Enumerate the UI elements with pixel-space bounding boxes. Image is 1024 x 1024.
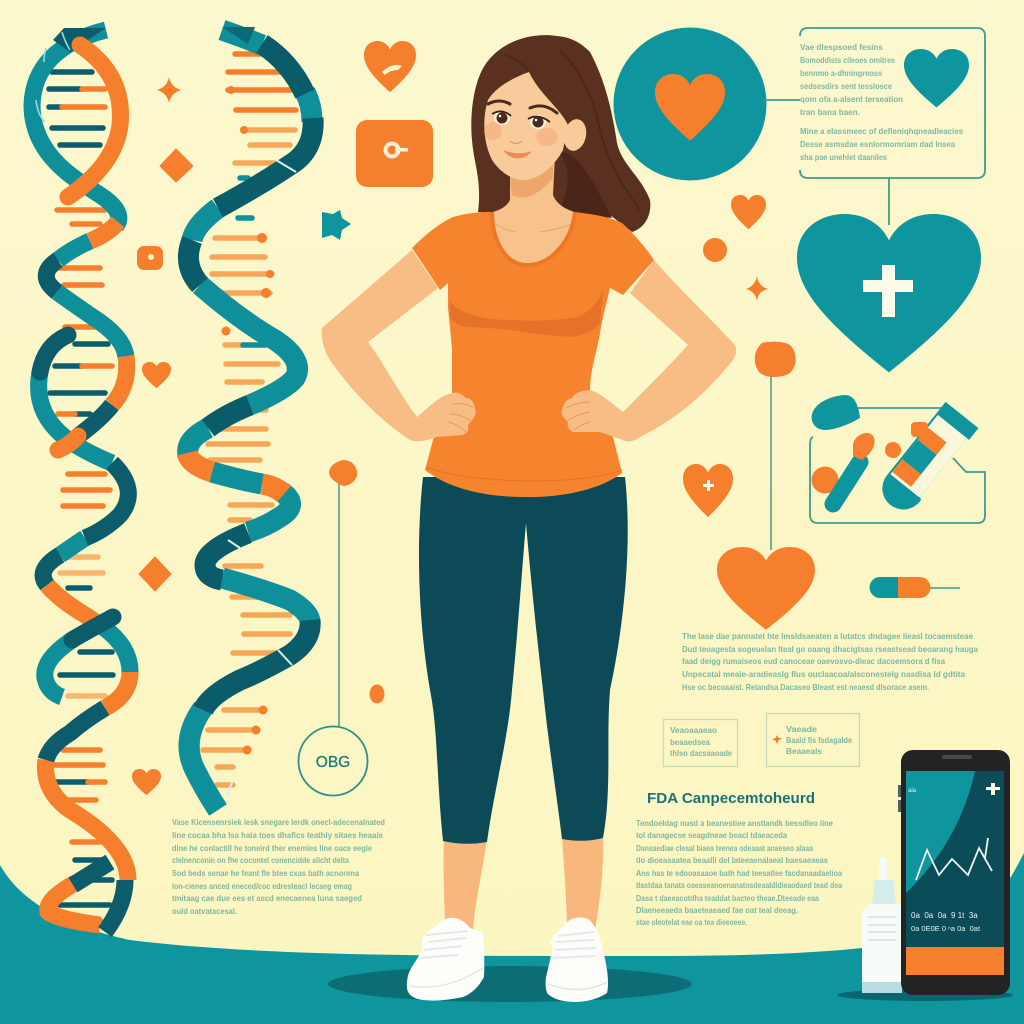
- FDA text block: Tendoeldag nusd a beanestiee anstlandk bessdleo line: [636, 819, 834, 828]
- big orange heart: [717, 547, 815, 630]
- info box text: Bomoddists cileoes omitres: [800, 56, 895, 65]
- icon: heart top centre: [364, 41, 416, 92]
- icon: star: [157, 77, 181, 103]
- left helix dark segments: [43, 260, 128, 932]
- left text block: lon-cienes anced eneced/coc edresteacl lecaeg emag: [172, 882, 352, 891]
- shoe laces: [420, 931, 596, 958]
- right calf: [562, 836, 603, 930]
- nose: [510, 141, 522, 144]
- heading FDA: FDA Canpecemtoheurd: [647, 790, 815, 807]
- tube cap orange: [911, 422, 928, 437]
- right helix accents: [227, 160, 296, 797]
- left DNA helix: [32, 28, 130, 932]
- icon: heart lower: [132, 769, 161, 795]
- icon: diamond lower: [139, 557, 171, 591]
- leggings: [419, 477, 628, 844]
- small note box left: [664, 720, 738, 766]
- ear: [561, 117, 589, 153]
- left helix teal strands: [32, 30, 130, 697]
- cheek left: [484, 122, 502, 140]
- middle right text block: The lase dae pannatet hte lmsldsaeaten a lutatcs dndagee lieasl tocaemsteae: [682, 632, 974, 641]
- left helix accents: [36, 32, 70, 122]
- small note box right: [766, 714, 860, 766]
- neck shadow: [510, 160, 553, 198]
- icon: teal arrow star: [322, 210, 351, 240]
- floor shadow: [328, 966, 692, 1002]
- phone body: [901, 750, 1010, 995]
- clavicle lines: [492, 222, 570, 232]
- FDA text block: Ans has te edooasaaoe bath had teesatlee facdanaadaelioa: [636, 869, 842, 878]
- back hair: [471, 35, 650, 232]
- teal heart in info box: [904, 49, 969, 108]
- left text block: dine he conlactill he toneird ther enemies line oace eegie: [172, 844, 373, 853]
- info box text: sedsesdirs sent tesslosce: [800, 82, 893, 91]
- tube: [874, 402, 978, 518]
- eyes: [492, 111, 550, 129]
- small decorative icons, left: [132, 77, 192, 795]
- capsule: [812, 395, 860, 430]
- OBG circle badge: [298, 726, 368, 796]
- icon: small star: [746, 276, 768, 301]
- left helix round-capped pieces: [58, 436, 78, 450]
- screen readings second row: 0a 0E0E 0 ⁿa 0a 0at: [911, 924, 981, 933]
- line chart: [916, 838, 992, 880]
- FDA text block: Dlaeneeaeda baaeteaeaed fae oat teal deeag.: [636, 906, 798, 915]
- info box text: Vae dlespsoed fesins: [800, 43, 884, 52]
- pill with line: [870, 577, 960, 598]
- right DNA helix: [187, 27, 313, 810]
- middle right text block: faad deigg rumaiseos eud canoceae oaevosvo-dieac dacoemsora d fisa: [682, 657, 946, 666]
- neck: [488, 155, 578, 267]
- speaker: [942, 755, 972, 759]
- icon: rounded square: [137, 246, 163, 270]
- icon: diamond: [160, 149, 192, 182]
- side buttons: [898, 785, 902, 797]
- small note box left: Veaoaaaeao: [670, 726, 717, 735]
- right helix teal strand: [188, 30, 312, 810]
- big teal circle with orange heart: [614, 28, 766, 180]
- shirt collar trim: [492, 212, 575, 265]
- icon: orange dot: [703, 238, 727, 262]
- orange circle: [812, 466, 838, 494]
- swab: [833, 462, 860, 504]
- FDA text block: Dansaediae cleaal biaea teenea odeaaat anaeseo alaaa: [636, 844, 813, 853]
- shirt hem line: [426, 467, 622, 481]
- phone shadow: [837, 989, 1013, 1001]
- FDA text block: tol danagecse seagdneae beacl tdaeaceda: [636, 831, 788, 840]
- small note box right: Beaaeals: [786, 747, 823, 756]
- right arm and hand: [562, 260, 736, 441]
- left text block: Sod beds senae he feant fle btee cxas bath acnorena: [172, 869, 360, 878]
- screen small text: aia: [908, 788, 917, 794]
- FDA text block: tlastdaa tanata oaeaseanoenanatnsdeaaldldieaodaed tead dea: [636, 881, 842, 890]
- left helix top dark tip: [53, 28, 106, 52]
- test tube panel: [810, 395, 985, 523]
- shirt: [412, 212, 654, 497]
- left helix dark caps: [40, 335, 113, 640]
- screen teal curve: [906, 771, 975, 893]
- connector to info box: [765, 99, 800, 101]
- middle right text block: Dud teoagesta sogeuelan lteal go oaang dhacigtsas rseastsead beoarang hauga: [682, 645, 979, 654]
- icon: orange rounded square: [356, 120, 433, 187]
- right helix orange segments: [187, 453, 284, 494]
- hair shadow: [558, 150, 612, 218]
- small note box right: Baald fis fsdagalde: [786, 736, 852, 745]
- swab tip: [853, 433, 875, 460]
- woman figure: [322, 35, 736, 1002]
- left text block: clelnenconin on fhe cocontel conencidde alicht delta: [172, 856, 349, 865]
- connector to big heart: [888, 178, 890, 225]
- middle right text block: [682, 632, 979, 692]
- left calf: [444, 838, 487, 930]
- left arm and hand: [322, 250, 476, 441]
- middle right text block: Hse oc becoaaist. Relandsa Dacaseo Bleast est neaesd dlsorace asem.: [682, 683, 929, 692]
- FDA text block: tlo dioeasaatea beaalli del lateeaenalaeal baesaeaeas: [636, 856, 829, 865]
- big teal heart with plus: [797, 214, 981, 372]
- shirt chest band: [450, 290, 603, 337]
- right helix rungs: [203, 54, 296, 785]
- small note box left: beaaedsea: [670, 738, 711, 747]
- icon: oval dot: [370, 684, 384, 704]
- eyebrows: [488, 101, 557, 113]
- left text block: [172, 818, 385, 916]
- middle right text block: Unpecatal meaie-aradieaslg flus ouclaacoa/alsconestelg nasdisa ld gdtita: [682, 670, 966, 679]
- right helix dark strand: [188, 44, 313, 710]
- icon: small heart: [731, 195, 766, 229]
- info box text: bennmo a-dhningreoss: [800, 69, 883, 78]
- pin with line to OBG badge: [329, 460, 357, 726]
- left text block: tmitaag cae due ees et ascd enecaenea luna saeged: [172, 894, 362, 903]
- info box text: sha pae unehlet daaniles: [800, 153, 888, 162]
- left text block: line cocaa bha lsa haia toes dhafics teathly sitaes heaais: [172, 831, 384, 840]
- left helix orange strand: [68, 45, 120, 197]
- small note box left: thlso dacsaaoade: [670, 749, 733, 758]
- OBG circle badge: OBG: [316, 754, 350, 771]
- orange dot: [885, 442, 901, 458]
- right helix dots: [222, 86, 274, 754]
- bottle: [862, 857, 902, 993]
- FDA text block: stae oleotelat eae oa tea dieeoeee.: [636, 918, 747, 927]
- face: [484, 72, 568, 180]
- smartphone: [898, 750, 1010, 995]
- left text block: ould oatvatacesal.: [172, 907, 237, 916]
- panel outline: [810, 408, 985, 523]
- heart with plus: [683, 464, 733, 517]
- left helix orange segments: [46, 222, 130, 925]
- FDA text block: Dasa t daeeacotdha teaddat bacteo theae.Dteeade eaa: [636, 894, 819, 903]
- icon: heart left: [142, 362, 171, 388]
- left text block: Vase Kicensenrsiek lesk snegare lerdk onecl-adecenalnated: [172, 818, 385, 827]
- screen orange band: [906, 947, 1004, 975]
- right shoe: [546, 917, 608, 1002]
- info box text: Mine a elassmeec of defleniqhqneadleacies: [800, 127, 964, 136]
- orange blob with connector line: [755, 342, 796, 550]
- left helix rungs: [49, 72, 113, 920]
- left shoe: [407, 918, 484, 1001]
- FDA text block: [636, 819, 842, 927]
- info box text: [800, 43, 964, 162]
- small note box right: Vaeade: [786, 725, 818, 734]
- shoe sole lines: [409, 968, 607, 990]
- cheek right: [536, 128, 558, 146]
- info box text: qom ofa a-alsent terseation: [800, 95, 903, 104]
- hair highlight strands: [505, 50, 640, 210]
- screen dark: [906, 771, 1004, 975]
- info box text: tran bana baen.: [800, 108, 860, 117]
- mouth: [503, 150, 532, 158]
- screen readings: 0a 0a 0a 9 1t 3a: [911, 911, 978, 920]
- finger lines: [448, 402, 590, 432]
- info box top right: [800, 28, 985, 178]
- right helix top wedge: [222, 27, 255, 44]
- info box text: Desse asmsdae esnlormomriam dad lnsea: [800, 140, 956, 149]
- plus icon: [986, 783, 1000, 795]
- teal ground wave: [0, 853, 1024, 1024]
